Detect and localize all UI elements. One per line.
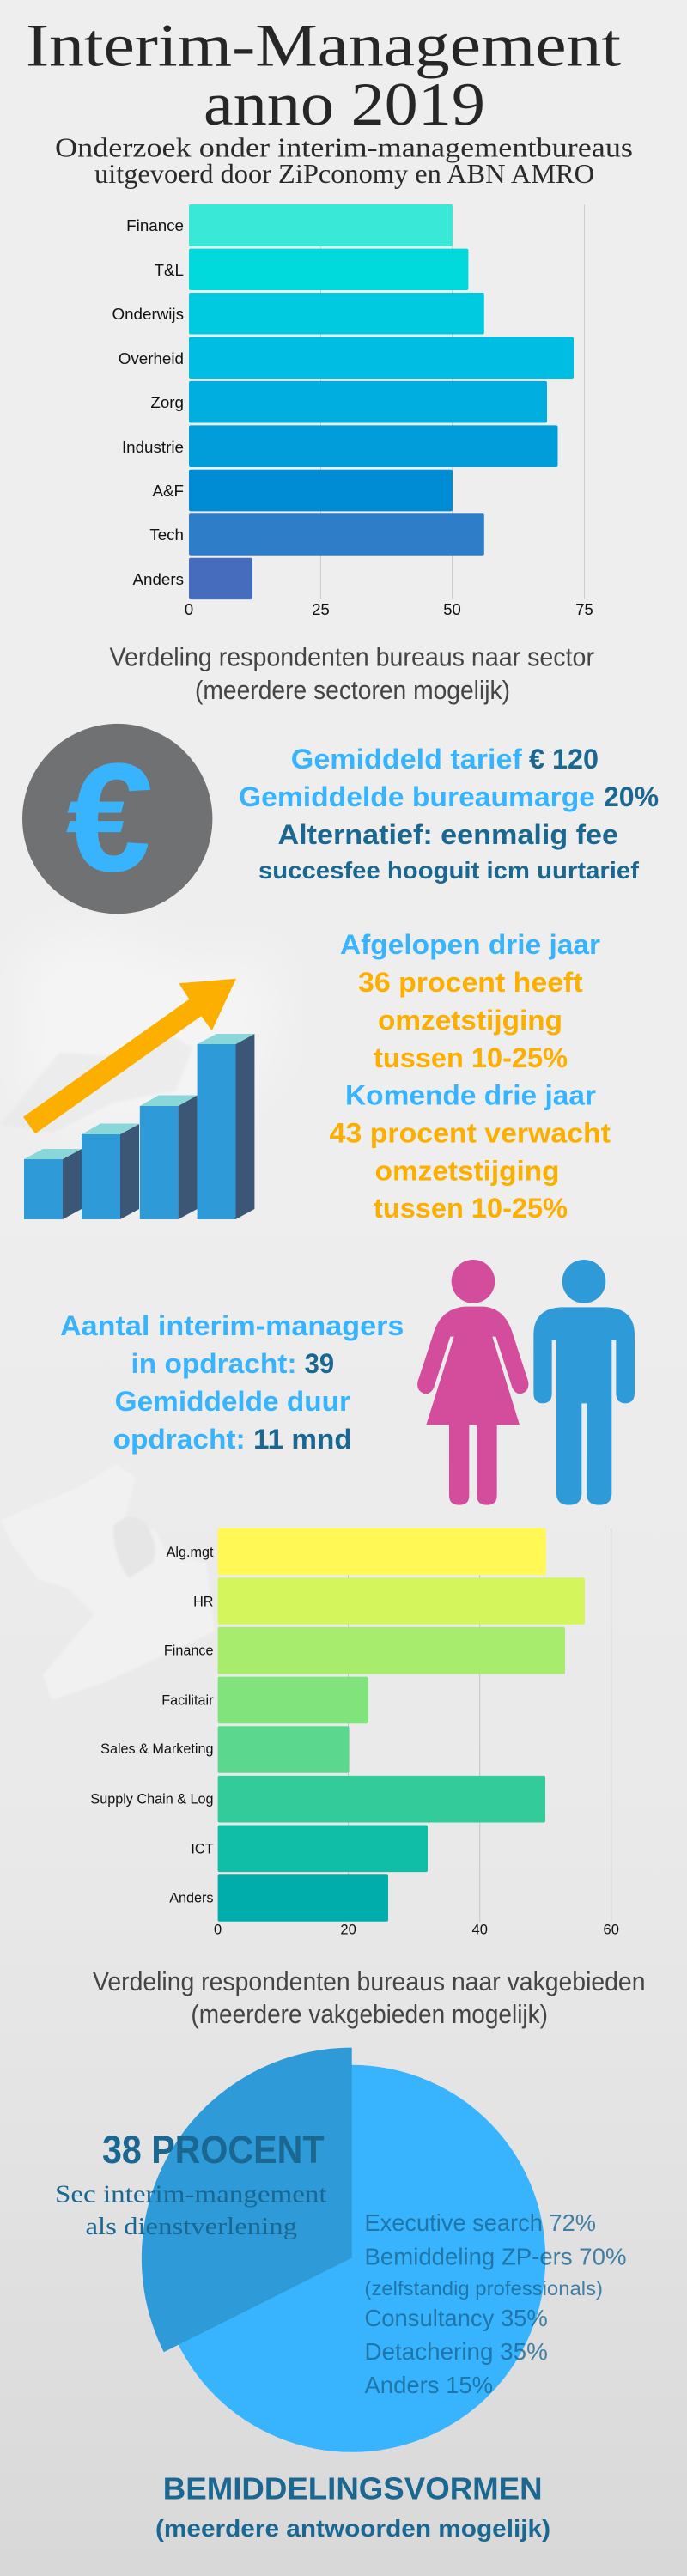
text block: interim managers: 39 bbox=[305, 1348, 334, 1379]
text block: revenue growth: Komende drie jaar bbox=[345, 1080, 596, 1111]
bar chart: specialist areas: 60 bbox=[604, 1923, 619, 1938]
callout: 38 percent bbox=[55, 2128, 327, 2240]
bar chart: sectors: Anders bbox=[132, 570, 184, 588]
title: anno 2019 bbox=[204, 71, 485, 138]
subtitle bbox=[55, 132, 633, 189]
text block: rates: succesfee hooguit icm uurtarief bbox=[258, 857, 640, 884]
text block: revenue growth: 36 procent heeft bbox=[358, 967, 583, 998]
bar chart: specialist areas: 0 bbox=[214, 1923, 222, 1938]
text block: revenue growth: Afgelopen drie jaar bbox=[340, 929, 600, 960]
caption: sectors: Verdeling respondenten bureaus naar sector bbox=[110, 642, 594, 671]
text block: rates: Gemiddeld tarief bbox=[291, 744, 522, 775]
bar chart: sectors: Industrie bbox=[122, 438, 184, 456]
icon: euro coin: € bbox=[62, 732, 156, 904]
bar chart: sectors bbox=[112, 204, 593, 618]
bar chart: sectors: 0 bbox=[185, 600, 193, 618]
bar chart: specialist areas: Anders bbox=[169, 1890, 213, 1905]
bar chart: sectors: Overheid bbox=[119, 349, 184, 368]
list: mediation percentages: Consultancy 35% bbox=[364, 2305, 548, 2331]
bar chart: sectors: Zorg bbox=[150, 393, 184, 411]
bar chart: sectors: Tech bbox=[149, 526, 184, 544]
bar chart: sectors: 50 bbox=[443, 600, 461, 618]
subtitle: uitgevoerd door ZiPconomy en ABN AMRO bbox=[94, 158, 594, 189]
text block: rates: 20% bbox=[604, 781, 659, 812]
list: mediation percentages: Detachering 35% bbox=[364, 2338, 548, 2365]
bar chart: sectors: T&L bbox=[155, 261, 184, 279]
caption: sectors: (meerdere sectoren mogelijk) bbox=[195, 676, 510, 705]
list: mediation percentages: Bemiddeling ZP-ers 70% bbox=[364, 2243, 627, 2270]
text block: interim managers: 11 mnd bbox=[253, 1424, 352, 1455]
pie chart: mediation forms bbox=[142, 2048, 545, 2452]
text block: revenue growth: 43 procent verwacht bbox=[330, 1118, 611, 1149]
text block: revenue growth: tussen 10-25% bbox=[374, 1193, 568, 1224]
text block: rates: Gemiddelde bureaumarge bbox=[239, 781, 595, 812]
bar chart: sectors: A&F bbox=[152, 482, 184, 500]
bar chart: specialist areas: Finance bbox=[164, 1643, 213, 1659]
text block: interim managers: in opdracht: bbox=[131, 1348, 297, 1379]
text block: rates: Alternatief: eenmalig fee bbox=[278, 819, 618, 850]
text block: rates: € 120 bbox=[529, 744, 599, 775]
text block: interim managers: Gemiddelde duur bbox=[115, 1386, 350, 1417]
heading: mediation forms: (meerdere antwoorden mogelijk) bbox=[155, 2515, 550, 2542]
callout: 38 percent: Sec interim-mangement bbox=[55, 2180, 327, 2208]
list: mediation percentages: (zelfstandig professionals) bbox=[364, 2277, 603, 2300]
bar chart: specialist areas bbox=[90, 1528, 619, 1938]
bar chart: specialist areas: 40 bbox=[472, 1923, 488, 1938]
caption: specialist areas: Verdeling respondenten bureaus naar vakgebieden bbox=[93, 1967, 646, 1996]
icon: woman and man bbox=[417, 1260, 635, 1505]
list: mediation percentages: Executive search 72% bbox=[364, 2209, 596, 2236]
text block: revenue growth: omzetstijging bbox=[378, 1005, 562, 1036]
bar chart: sectors: 25 bbox=[312, 600, 330, 618]
title bbox=[26, 12, 621, 138]
caption: specialist areas: (meerdere vakgebieden mogelijk) bbox=[191, 2000, 548, 2029]
title: Interim-Management bbox=[26, 12, 621, 79]
bar chart: specialist areas: ICT bbox=[191, 1842, 214, 1857]
icon: rising bar chart with arrow bbox=[23, 979, 254, 1219]
caption: sectors bbox=[110, 642, 594, 705]
bar chart: specialist areas: Sales & Marketing bbox=[100, 1741, 213, 1757]
bar chart: specialist areas: HR bbox=[193, 1594, 213, 1609]
text block: revenue growth: omzetstijging bbox=[375, 1156, 560, 1187]
bar chart: specialist areas: Supply Chain & Log bbox=[90, 1791, 213, 1807]
bar chart: sectors: 75 bbox=[575, 600, 593, 618]
bar chart: specialist areas: Facilitair bbox=[161, 1693, 214, 1709]
icon: euro coin bbox=[22, 724, 212, 914]
bar chart: sectors: Finance bbox=[126, 216, 184, 234]
callout: 38 percent: als dienstverlening bbox=[86, 2213, 297, 2240]
text block: interim managers bbox=[60, 1310, 404, 1455]
heading: mediation forms bbox=[155, 2471, 550, 2542]
bar chart: specialist areas: 20 bbox=[340, 1923, 356, 1938]
subtitle: Onderzoek onder interim-managementbureaus bbox=[55, 132, 633, 163]
text block: revenue growth: tussen 10-25% bbox=[374, 1042, 568, 1073]
heading: mediation forms: BEMIDDELINGSVORMEN bbox=[163, 2471, 543, 2506]
list: mediation percentages bbox=[364, 2209, 627, 2398]
text block: revenue growth bbox=[330, 929, 611, 1224]
list: mediation percentages: Anders 15% bbox=[364, 2372, 493, 2398]
text block: interim managers: Aantal interim-managers bbox=[60, 1310, 404, 1341]
bar chart: specialist areas: Alg.mgt bbox=[167, 1545, 214, 1560]
caption: specialist areas bbox=[93, 1967, 646, 2029]
bar chart: sectors: Onderwijs bbox=[112, 305, 184, 323]
text block: rates bbox=[239, 744, 659, 884]
text block: interim managers: opdracht: bbox=[113, 1424, 246, 1455]
callout: 38 percent: 38 PROCENT bbox=[102, 2128, 325, 2172]
